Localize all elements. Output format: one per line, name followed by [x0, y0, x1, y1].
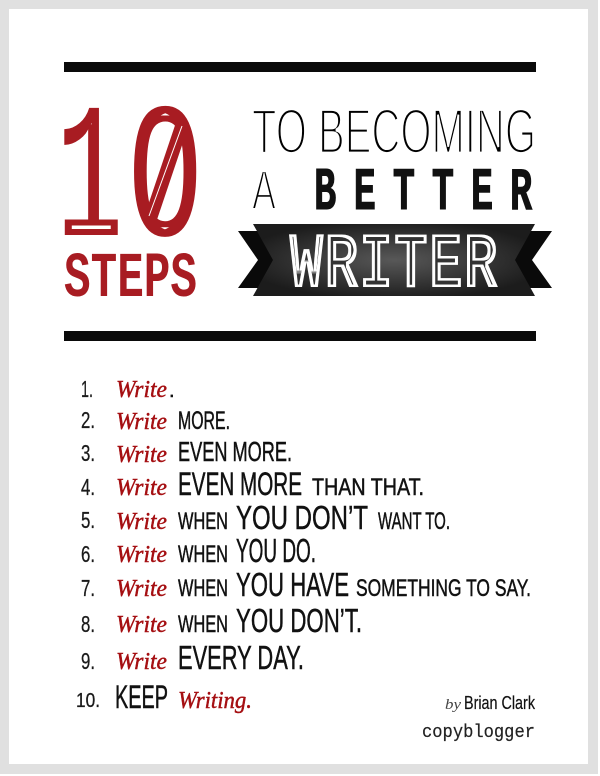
step 9: EVERY DAY.: [178, 639, 304, 676]
zero slash: [149, 122, 183, 220]
step 4: Write: [116, 475, 167, 501]
step 1: .: [169, 380, 175, 402]
ribbon left tail: [238, 231, 290, 288]
step 3: 3.: [81, 440, 95, 466]
step 8: YOU DON’T.: [236, 602, 362, 639]
copyblogger wordmark: copyblogger: [422, 723, 535, 743]
step 5: Write: [116, 509, 167, 535]
ribbon right tail: [500, 231, 552, 288]
step 10: [76, 679, 252, 715]
step 2: Write: [116, 409, 167, 435]
ribbon body: [253, 224, 535, 296]
word steps: STEPS: [64, 244, 197, 316]
step 7: [81, 566, 531, 603]
top rule: [64, 62, 536, 72]
numeral 10: 1: [57, 76, 122, 292]
step 4: [81, 466, 424, 502]
step 2: MORE.: [178, 407, 230, 435]
step 8: 8.: [81, 611, 95, 637]
step 7: YOU HAVE: [236, 566, 349, 603]
step 10: 10.: [76, 690, 100, 712]
step 6: YOU DO.: [236, 532, 316, 569]
step 6: WHEN: [178, 541, 228, 568]
step 8: WHEN: [178, 611, 228, 638]
step 6: Write: [116, 542, 167, 568]
step 8: Write: [116, 612, 167, 638]
step 5: [81, 499, 450, 536]
ribbon banner: [238, 221, 552, 312]
step 3: EVEN MORE.: [178, 436, 292, 467]
step 5: WHEN: [178, 508, 228, 535]
title: a: A: [252, 158, 276, 221]
step 7: 7.: [81, 575, 95, 601]
step 7: WHEN: [178, 575, 228, 602]
step 9: Write: [116, 649, 167, 675]
step 7: Write: [116, 576, 167, 602]
byline: [445, 693, 536, 713]
word writer: WRITER: [289, 221, 498, 312]
step 5: 5.: [81, 507, 95, 533]
step 9: 9.: [81, 648, 95, 674]
bottom rule: [64, 331, 536, 341]
step 5: WANT TO.: [378, 508, 450, 535]
step 6: [81, 532, 316, 569]
title: 10 steps: [57, 75, 203, 316]
title: better: BETTER: [314, 159, 532, 227]
step 1: Write: [116, 377, 167, 403]
step 4: EVEN MORE: [178, 466, 302, 502]
byline: by: [445, 697, 461, 713]
step 10: KEEP: [115, 679, 168, 715]
step 7: SOMETHING TO SAY.: [356, 575, 531, 602]
step list: [76, 376, 531, 715]
numeral 10: [57, 75, 203, 292]
step 1: 1.: [81, 376, 93, 402]
step 1: [81, 376, 175, 403]
byline: Brian Clark: [464, 693, 536, 713]
step 3: Write: [116, 442, 167, 468]
step 10: Writing.: [178, 688, 252, 714]
step 3: [81, 436, 292, 468]
step 2: [81, 407, 230, 435]
step 5: YOU DON’T: [236, 499, 368, 536]
numeral 10: 0: [127, 75, 203, 292]
step 6: 6.: [81, 541, 95, 567]
step 8: [81, 602, 362, 639]
step 4: 4.: [81, 474, 95, 500]
step 2: 2.: [81, 407, 95, 433]
step 4: THAN THAT.: [312, 474, 424, 501]
step 9: [81, 639, 304, 676]
